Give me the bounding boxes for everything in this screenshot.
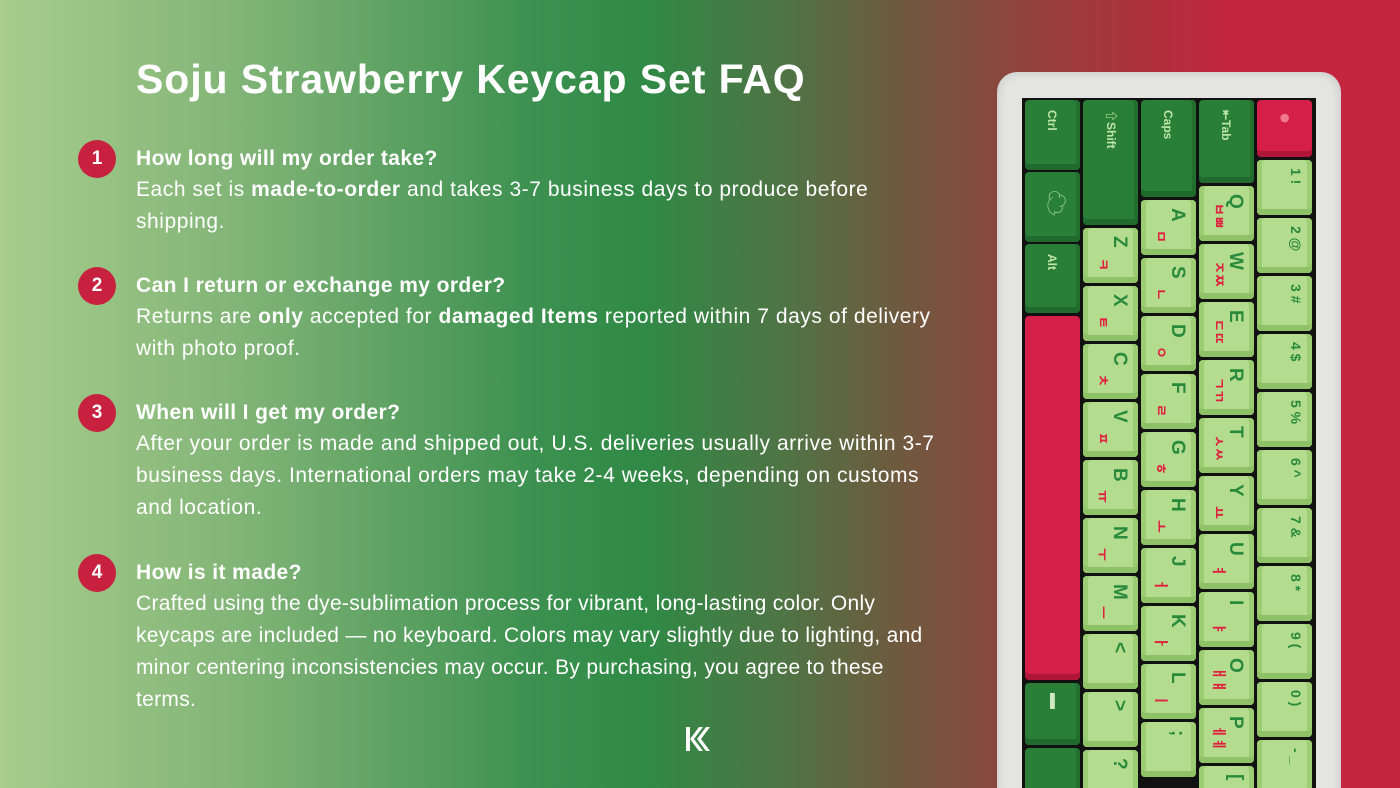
keycaps: Y xyxy=(1225,484,1246,497)
faq item 4: keycaps are included — no keyboard. Colors may vary slightly due to lighting, and xyxy=(136,624,923,647)
keycaps: ㅔㅖ xyxy=(1211,725,1227,751)
keycaps: ㅋ xyxy=(1095,258,1111,271)
keycaps: ㅑ xyxy=(1211,622,1227,635)
faq item 4: terms. xyxy=(136,688,196,711)
keycaps: L xyxy=(1167,672,1188,684)
keycaps: ㅍ xyxy=(1095,432,1111,445)
keycaps: ㅕ xyxy=(1211,564,1227,577)
number badge 4: 4 xyxy=(92,562,102,583)
faq item 4 xyxy=(78,554,923,711)
keycaps: < xyxy=(1109,642,1130,653)
faq item 4: minor centering inconsistencies may occur. By purchasing, you agree to these xyxy=(136,656,884,679)
keycaps: ㅡ xyxy=(1095,606,1111,619)
keycaps: ㄷㄸ xyxy=(1211,319,1227,345)
keycaps: ㅗ xyxy=(1153,520,1169,533)
keycaps: Alt xyxy=(1045,254,1059,270)
faq item 4: Crafted using the dye-sublimation process for vibrant, long-lasting color. Only xyxy=(136,592,875,615)
faq item 1: Each set is made-to-order and takes 3-7 business days to produce before shipping. xyxy=(136,178,868,233)
keycaps: [ xyxy=(1225,774,1246,780)
keycaps: ㄱㄲ xyxy=(1211,377,1227,403)
number badge 1 xyxy=(78,140,116,178)
keycaps: ㅏ xyxy=(1153,636,1169,649)
keyboard image xyxy=(997,72,1341,788)
keycaps: Ctrl xyxy=(1045,110,1059,131)
keycaps: ⇤Tab xyxy=(1219,110,1233,140)
keycaps: ㅌ xyxy=(1095,316,1111,329)
keycaps: P xyxy=(1225,716,1246,729)
keycaps: ? xyxy=(1109,758,1130,770)
faq item 3: When will I get my order? xyxy=(136,401,400,424)
keycaps: Caps xyxy=(1161,110,1175,139)
number badge 2 xyxy=(78,267,116,305)
title: Soju Strawberry Keycap Set FAQ xyxy=(136,56,806,102)
keycaps: U xyxy=(1225,542,1246,556)
keycaps: ⇧Shift xyxy=(1104,110,1118,149)
keycaps: J xyxy=(1167,556,1188,567)
keycaps: ㅅㅆ xyxy=(1211,435,1227,461)
keycaps: I xyxy=(1225,600,1246,605)
keycaps: H xyxy=(1167,498,1188,512)
keycaps: 6 ^ xyxy=(1288,458,1304,478)
keycaps: 9 ( xyxy=(1288,632,1304,648)
keycaps: ▬ xyxy=(1046,693,1063,709)
keycaps: ㅎ xyxy=(1153,462,1169,475)
faq item 3: After your order is made and shipped out, U.S. deliveries usually arrive within 3-7 business days. International orders may take 2-4 weeks, depending on customs and location. xyxy=(136,432,935,519)
keycaps: C xyxy=(1109,352,1130,366)
keycaps: ㅛ xyxy=(1211,506,1227,519)
keycaps: ; xyxy=(1167,730,1188,736)
keycaps: X xyxy=(1109,294,1130,307)
faq item 1: How long will my order take? xyxy=(136,147,438,170)
number badge 1: 1 xyxy=(92,148,102,169)
number badge 3 xyxy=(78,394,116,432)
keycaps: 4 $ xyxy=(1288,342,1304,361)
keycaps: A xyxy=(1167,208,1188,222)
keycaps: S xyxy=(1167,266,1188,279)
keycaps: ㅜ xyxy=(1095,548,1111,561)
number badge 2: 2 xyxy=(92,275,102,296)
keycaps: ㅐㅒ xyxy=(1211,667,1227,693)
keycaps: ㅊ xyxy=(1095,374,1111,387)
keycaps: 2 @ xyxy=(1288,226,1304,251)
keycaps: N xyxy=(1109,526,1130,540)
faq item 1 xyxy=(78,140,868,233)
faq item 2: Returns are only accepted for damaged Items reported within 7 days of delivery with photo proof. xyxy=(136,305,931,360)
faq item 2: Can I return or exchange my order? xyxy=(136,274,506,297)
keycaps: E xyxy=(1225,310,1246,323)
keycaps: ㅓ xyxy=(1153,578,1169,591)
keycaps: Z xyxy=(1109,236,1130,248)
keycaps: ㅁ xyxy=(1153,230,1169,243)
keycaps xyxy=(1025,100,1312,788)
number badge 3: 3 xyxy=(92,402,102,423)
keycaps: M xyxy=(1109,584,1130,600)
keycaps: > xyxy=(1109,700,1130,711)
keycaps: F xyxy=(1167,382,1188,394)
keycaps: 7 & xyxy=(1288,516,1304,538)
keycaps: D xyxy=(1167,324,1188,338)
keycaps: 1 ! xyxy=(1288,168,1304,184)
keycaps: ㅂㅃ xyxy=(1211,203,1227,229)
keycaps: 0 ) xyxy=(1288,690,1304,706)
faq item 3 xyxy=(78,394,935,519)
keycaps: ● xyxy=(1274,112,1296,124)
keycaps: ㄴ xyxy=(1153,288,1169,301)
keycaps: Q xyxy=(1225,194,1246,209)
keycaps: ㄹ xyxy=(1153,404,1169,417)
keycaps: T xyxy=(1225,426,1246,438)
keycaps: - _ xyxy=(1288,748,1304,764)
keycaps: ㅣ xyxy=(1153,694,1169,707)
keycaps: K xyxy=(1167,614,1188,628)
keycaps: G xyxy=(1167,440,1188,455)
faq item 2 xyxy=(78,267,931,360)
keycaps: O xyxy=(1225,658,1246,673)
keycaps: ㅈㅉ xyxy=(1211,261,1227,287)
keycaps: 3 # xyxy=(1288,284,1304,303)
keycaps: ㅠ xyxy=(1095,490,1111,503)
keycaps: ㅇ xyxy=(1153,346,1169,359)
keycaps: W xyxy=(1225,252,1246,270)
keycaps: R xyxy=(1225,368,1246,382)
keycaps: 5 % xyxy=(1288,400,1304,424)
keycaps: 8 * xyxy=(1288,574,1304,591)
number badge 4 xyxy=(78,554,116,592)
keycaps: B xyxy=(1109,468,1130,482)
logo xyxy=(686,727,710,751)
faq item 4: How is it made? xyxy=(136,561,302,584)
keycaps: V xyxy=(1109,410,1130,423)
keycaps: ☁ xyxy=(1041,190,1071,216)
